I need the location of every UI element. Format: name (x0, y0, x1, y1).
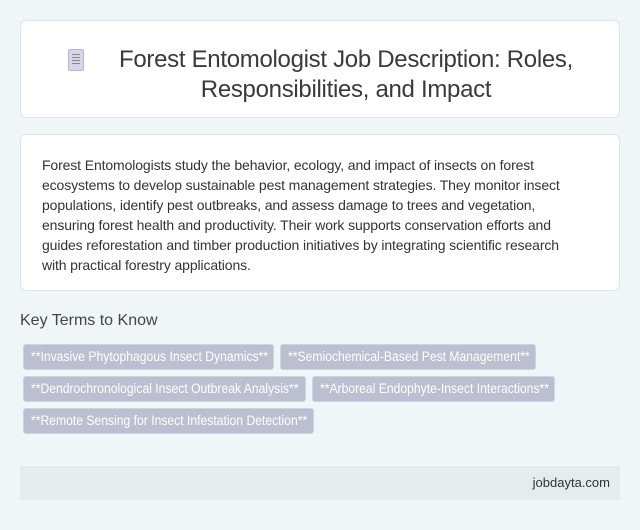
footer text: jobdayta.com (533, 475, 610, 490)
icon: document (68, 49, 84, 71)
tag 2: **Semiochemical-Based Pest Management** (288, 349, 530, 364)
tag 4 (312, 376, 555, 402)
description text: Forest Entomologists study the behavior, ecology, and impact of insects on forest ecosystems to develop sustainable pest management strategies. They monitor insect populations, identify pest outbreaks, and assess damage to trees and vegetation, ensuring forest health and productivity. Their work supports conservation efforts and guides reforestation and timber production initiatives by integrating scientific research with practical forestry applications. (42, 157, 560, 273)
tag 5: **Remote Sensing for Insect Infestation Detection** (31, 413, 307, 428)
heading: key terms: Key Terms to Know (20, 312, 158, 329)
description card (20, 134, 620, 291)
tag 3: **Dendrochronological Insect Outbreak Analysis** (31, 381, 298, 396)
tag 3 (23, 376, 306, 402)
tag 2 (280, 344, 536, 370)
tag 1 (23, 344, 274, 370)
title: Forest Entomologist Job Description: Roles, Responsibilities, and Impact (119, 46, 573, 103)
tag 5 (23, 408, 314, 434)
tag 1: **Invasive Phytophagous Insect Dynamics** (31, 349, 268, 364)
header card (20, 20, 620, 118)
tag 4: **Arboreal Endophyte-Insect Interactions** (320, 381, 549, 396)
footer (20, 466, 620, 500)
